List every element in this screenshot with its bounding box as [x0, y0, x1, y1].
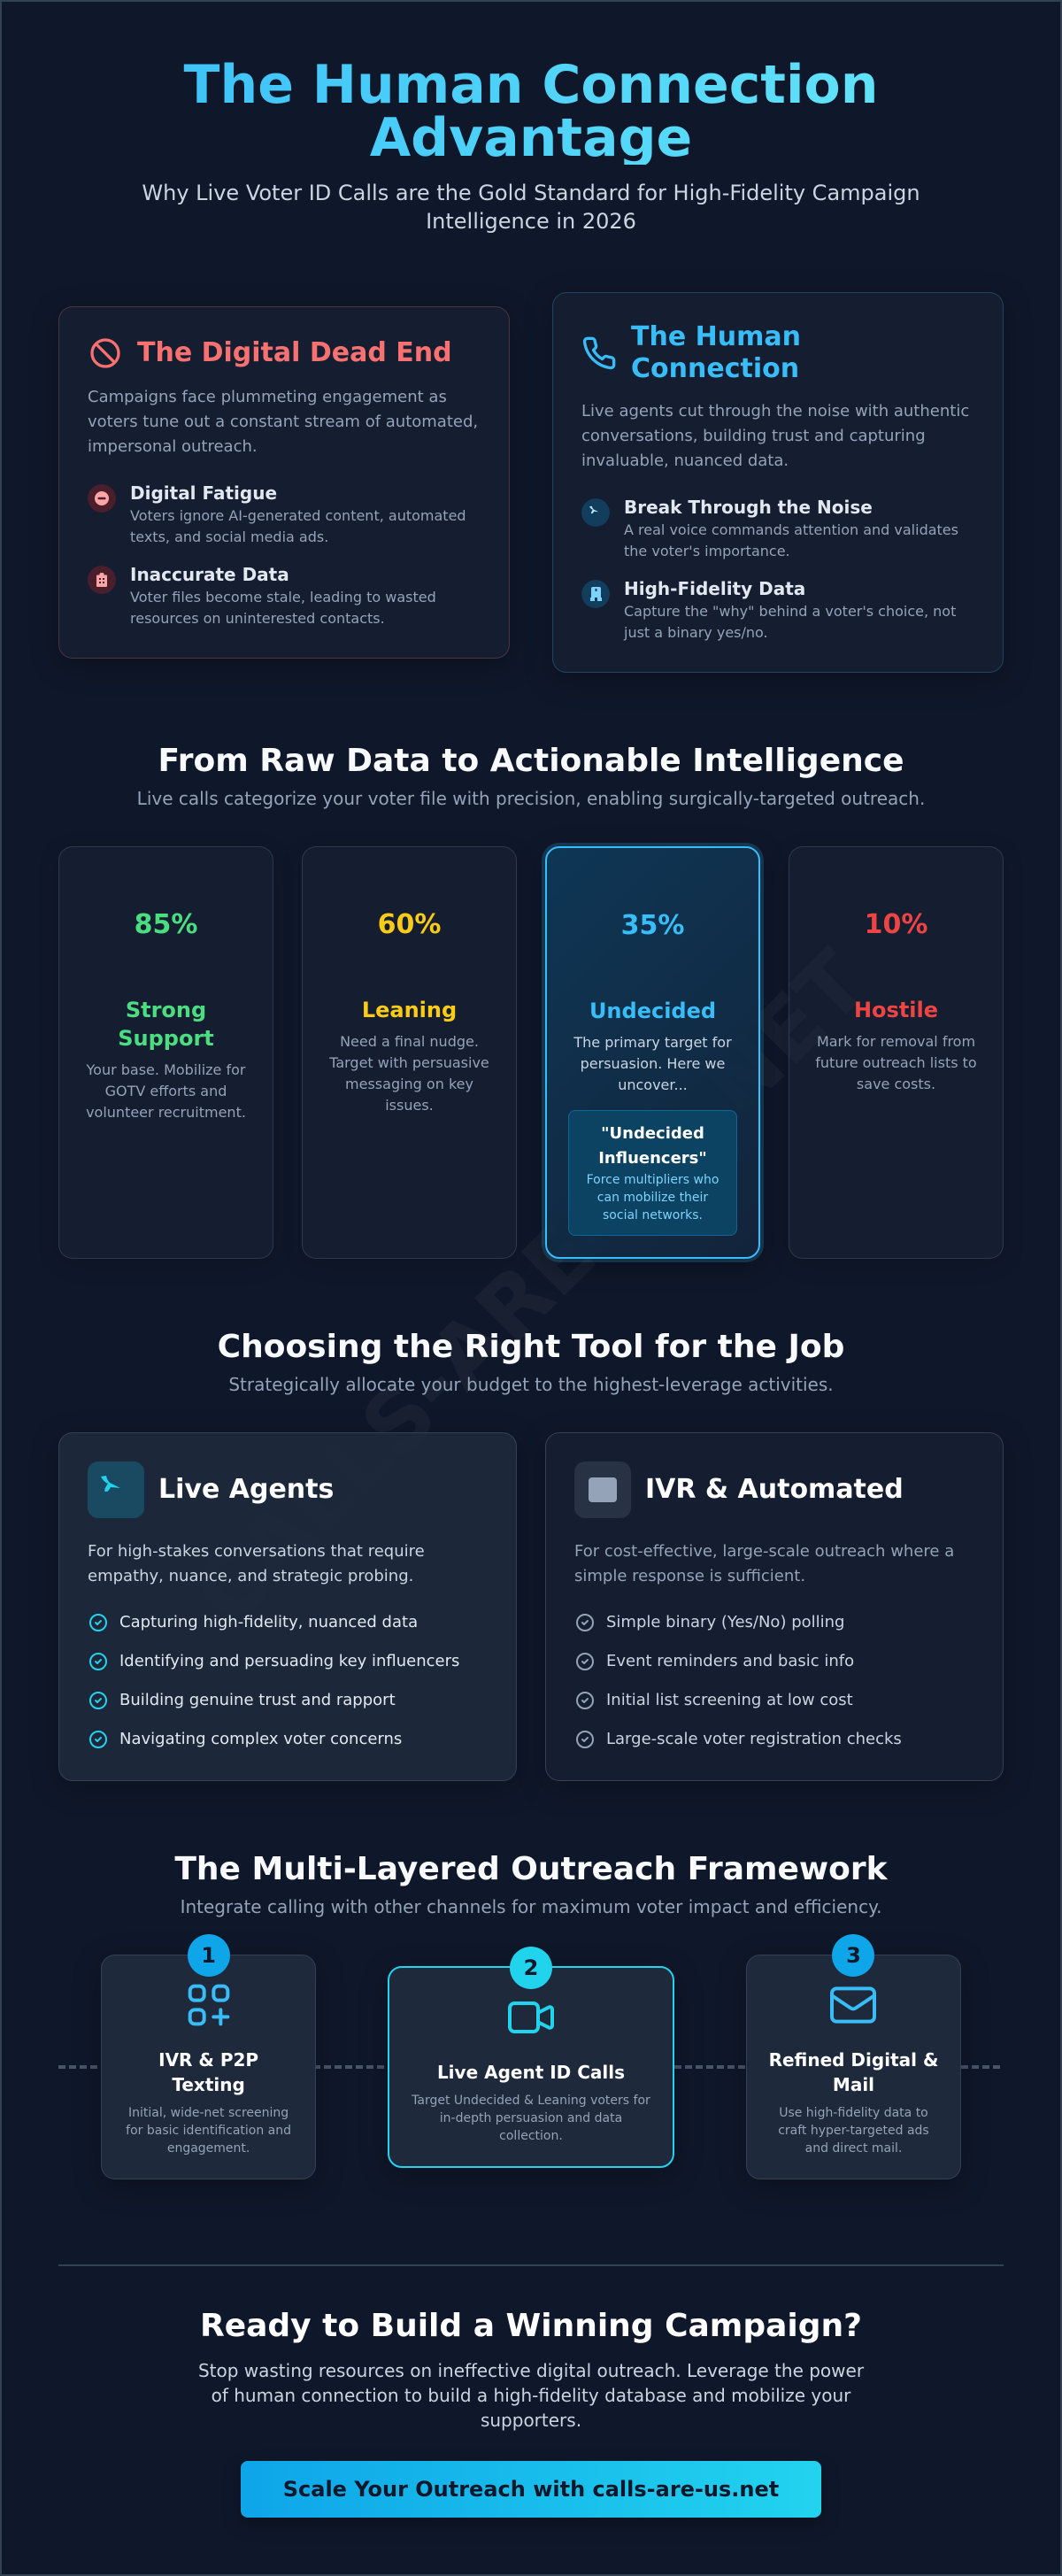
badge 3: [832, 1934, 874, 1977]
title: [58, 58, 1004, 165]
card: undecided: Undecided: [589, 999, 716, 1023]
step 3: Refined Digital &: [769, 2049, 938, 2071]
card: undecided: uncover...: [618, 1076, 688, 1093]
card: hostile: Mark for removal from: [817, 1033, 975, 1050]
icon: ivr square: [574, 1462, 631, 1518]
card: leaning: Target with persuasive: [329, 1054, 489, 1071]
comparison panels: [58, 292, 1004, 673]
section heading: raw data: From Raw Data to Actionable Intelligence: [158, 743, 904, 779]
cta text: [198, 2360, 864, 2431]
checklist: Building genuine trust and rapport: [119, 1691, 396, 1709]
item: break through the noise: Break Through the Noise: [624, 497, 873, 518]
icon: live agents: [88, 1462, 144, 1518]
call to action: [58, 2264, 1004, 2518]
panel heading: [88, 1462, 334, 1518]
icon: voice glyph: [581, 498, 610, 527]
cta button: [241, 2461, 821, 2518]
header: [142, 54, 920, 234]
step 1: engagement.: [167, 2141, 250, 2156]
card: leaning: Need a final nudge.: [340, 1033, 479, 1050]
item: digital fatigue: [88, 482, 466, 545]
item: high-fidelity data: High-Fidelity Data: [624, 578, 805, 599]
card: leaning: issues.: [385, 1097, 434, 1114]
panel description: For high-stakes conversations that require: [88, 1542, 425, 1561]
item: break through the noise: the voter's importance.: [624, 543, 790, 559]
checklist: [89, 1613, 459, 1748]
icon: minus circle: [88, 484, 116, 513]
section heading: framework: Integrate calling with other channels for maximum voter impact and efficiency.: [181, 1896, 881, 1917]
section heading: raw data: Live calls categorize your voter file with precision, enabling surgically-targeted outreach.: [137, 788, 925, 809]
icon: mail: [830, 1986, 876, 2024]
card: strong support: volunteer recruitment.: [86, 1104, 246, 1121]
cta text: supporters.: [481, 2410, 581, 2431]
card: leaning: Leaning: [362, 998, 457, 1022]
badge 3: 3: [846, 1943, 861, 1968]
card: undecided: persuasion. Here we: [581, 1055, 725, 1072]
panel description: impersonal outreach.: [88, 437, 258, 456]
item: high-fidelity data: just a binary yes/no.: [624, 624, 768, 641]
checklist: Capturing high-fidelity, nuanced data: [119, 1613, 418, 1631]
card: hostile: save costs.: [857, 1076, 935, 1092]
item: inaccurate data: Inaccurate Data: [130, 564, 289, 585]
card: leaning: messaging on key: [345, 1076, 473, 1092]
badge 1: 1: [201, 1943, 216, 1968]
icon: data glyph: [581, 580, 610, 608]
card: strong support: GOTV efforts and: [105, 1083, 227, 1099]
checklist: Navigating complex voter concerns: [119, 1730, 402, 1748]
icon: grid add: [188, 1985, 230, 2025]
panel description: [88, 388, 478, 456]
item: digital fatigue: Digital Fatigue: [130, 482, 277, 504]
step 2: [388, 1966, 674, 2168]
panel: live agents: [58, 1432, 517, 1781]
item: inaccurate data: resources on uninterested contacts.: [130, 610, 385, 627]
voter segment cards: [58, 843, 1004, 1268]
panel description: invaluable, nuanced data.: [581, 451, 789, 470]
panel description: For cost-effective, large-scale outreach where a: [574, 1542, 954, 1561]
panel: the digital dead end: [58, 306, 510, 659]
icon: video camera: [508, 2001, 554, 2033]
item: digital fatigue: Voters ignore AI-generated content, automated: [130, 507, 466, 524]
tool comparison panels: [58, 1432, 1004, 1781]
badge 2: [510, 1947, 552, 1989]
panel heading: IVR & Automated: [645, 1474, 904, 1505]
card: leaning: [302, 846, 517, 1259]
card: hostile: [789, 846, 1004, 1259]
callout: undecided influencers: "Undecided: [601, 1124, 704, 1143]
step 3: [746, 1955, 961, 2179]
panel description: simple response is sufficient.: [574, 1567, 805, 1585]
subtitle: Intelligence in 2026: [426, 209, 636, 234]
card: leaning: 60%: [378, 909, 441, 940]
card: strong support: 85%: [135, 909, 197, 940]
title: The Human Connection: [184, 54, 878, 116]
item: high-fidelity data: Capture the "why" behind a voter's choice, not: [624, 603, 956, 620]
step 2: collection.: [499, 2129, 563, 2143]
panel heading: [574, 1462, 904, 1518]
step 2: in-depth persuasion and data: [440, 2111, 622, 2125]
badge 2: 2: [524, 1955, 538, 1980]
checklist: [576, 1613, 902, 1748]
cta text: of human connection to build a high-fidelity database and mobilize your: [212, 2385, 850, 2406]
panel description: Live agents cut through the noise with authentic: [581, 402, 969, 420]
section heading: raw data: [137, 743, 925, 809]
panel description: [574, 1542, 954, 1585]
callout: undecided influencers: can mobilize their: [597, 1191, 708, 1205]
item: inaccurate data: [88, 564, 436, 627]
step 1: IVR & P2P: [158, 2049, 258, 2071]
panel heading: The Human: [631, 321, 801, 352]
step 3: Use high-fidelity data to: [779, 2106, 928, 2120]
cta text: Stop wasting resources on ineffective digital outreach. Leverage the power: [198, 2360, 864, 2381]
callout: undecided influencers: Force multipliers who: [587, 1173, 719, 1187]
outreach framework flow: [58, 1934, 1000, 2181]
card: undecided: [545, 846, 760, 1259]
icon: phone: [582, 336, 616, 370]
panel heading: The Digital Dead End: [137, 337, 452, 368]
card: hostile: future outreach lists to: [815, 1054, 977, 1071]
card: strong support: Your base. Mobilize for: [87, 1061, 245, 1078]
step 3: and direct mail.: [805, 2141, 902, 2156]
step 2: Target Undecided & Leaning voters for: [412, 2094, 650, 2108]
step 3: Mail: [833, 2074, 874, 2095]
icon: ban: [90, 338, 120, 368]
item: inaccurate data: Voter files become stale, leading to wasted: [130, 589, 436, 605]
panel description: voters tune out a constant stream of automated,: [88, 413, 478, 431]
icon: clipboard: [88, 566, 116, 594]
panel description: [581, 402, 969, 470]
panel description: conversations, building trust and capturing: [581, 427, 926, 445]
card: hostile: 10%: [865, 909, 927, 940]
callout: undecided influencers: [568, 1110, 737, 1236]
card: undecided: The primary target for: [573, 1034, 732, 1051]
panel: ivr and automated: [545, 1432, 1004, 1781]
callout: undecided influencers: Influencers": [598, 1149, 707, 1168]
section heading: right tool: [218, 1329, 844, 1395]
subtitle: Why Live Voter ID Calls are the Gold Standard for High-Fidelity Campaign: [142, 181, 920, 205]
title: Advantage: [370, 107, 692, 169]
panel heading: Live Agents: [158, 1474, 334, 1505]
panel heading: [582, 321, 801, 384]
step 3: craft hyper-targeted ads: [778, 2124, 929, 2138]
section heading: framework: [174, 1851, 889, 1917]
watermark: CALLS-ARE-US.NET: [175, 932, 887, 1644]
panel description: [88, 1542, 425, 1585]
checklist: Simple binary (Yes/No) polling: [606, 1613, 844, 1631]
badge 1: [188, 1934, 230, 1977]
panel heading: Connection: [631, 353, 799, 384]
section heading: framework: The Multi-Layered Outreach Framework: [174, 1851, 888, 1887]
item: digital fatigue: texts, and social media ads.: [130, 528, 328, 545]
panel description: empathy, nuance, and strategic probing.: [88, 1567, 413, 1585]
item: high-fidelity data: [581, 578, 956, 641]
step 2: Live Agent ID Calls: [437, 2062, 625, 2083]
section heading: right tool: Strategically allocate your budget to the highest-leverage activities.: [228, 1374, 834, 1395]
card: strong support: Strong: [126, 998, 206, 1022]
step 1: for basic identification and: [126, 2124, 291, 2138]
step 1: Texting: [172, 2074, 245, 2095]
callout: undecided influencers: social networks.: [603, 1208, 703, 1222]
step 1: [101, 1955, 316, 2179]
card: strong support: Support: [118, 1026, 214, 1051]
item: break through the noise: [581, 497, 958, 559]
card: hostile: Hostile: [854, 998, 938, 1022]
step 1: Initial, wide-net screening: [128, 2106, 289, 2120]
cta heading: Ready to Build a Winning Campaign?: [200, 2308, 862, 2344]
checklist: Initial list screening at low cost: [606, 1691, 853, 1709]
panel: the human connection: [552, 292, 1004, 673]
checklist: Event reminders and basic info: [606, 1652, 854, 1670]
section heading: right tool: Choosing the Right Tool for the Job: [218, 1329, 844, 1365]
subtitle: [142, 181, 920, 234]
cta button: Scale Your Outreach with calls-are-us.net: [283, 2477, 779, 2502]
panel description: Campaigns face plummeting engagement as: [88, 388, 447, 406]
item: break through the noise: A real voice commands attention and validates: [624, 521, 958, 538]
checklist: Identifying and persuading key influencers: [119, 1652, 459, 1670]
card: strong support: [58, 846, 273, 1259]
checklist: Large-scale voter registration checks: [606, 1730, 902, 1748]
card: undecided: 35%: [621, 910, 684, 941]
